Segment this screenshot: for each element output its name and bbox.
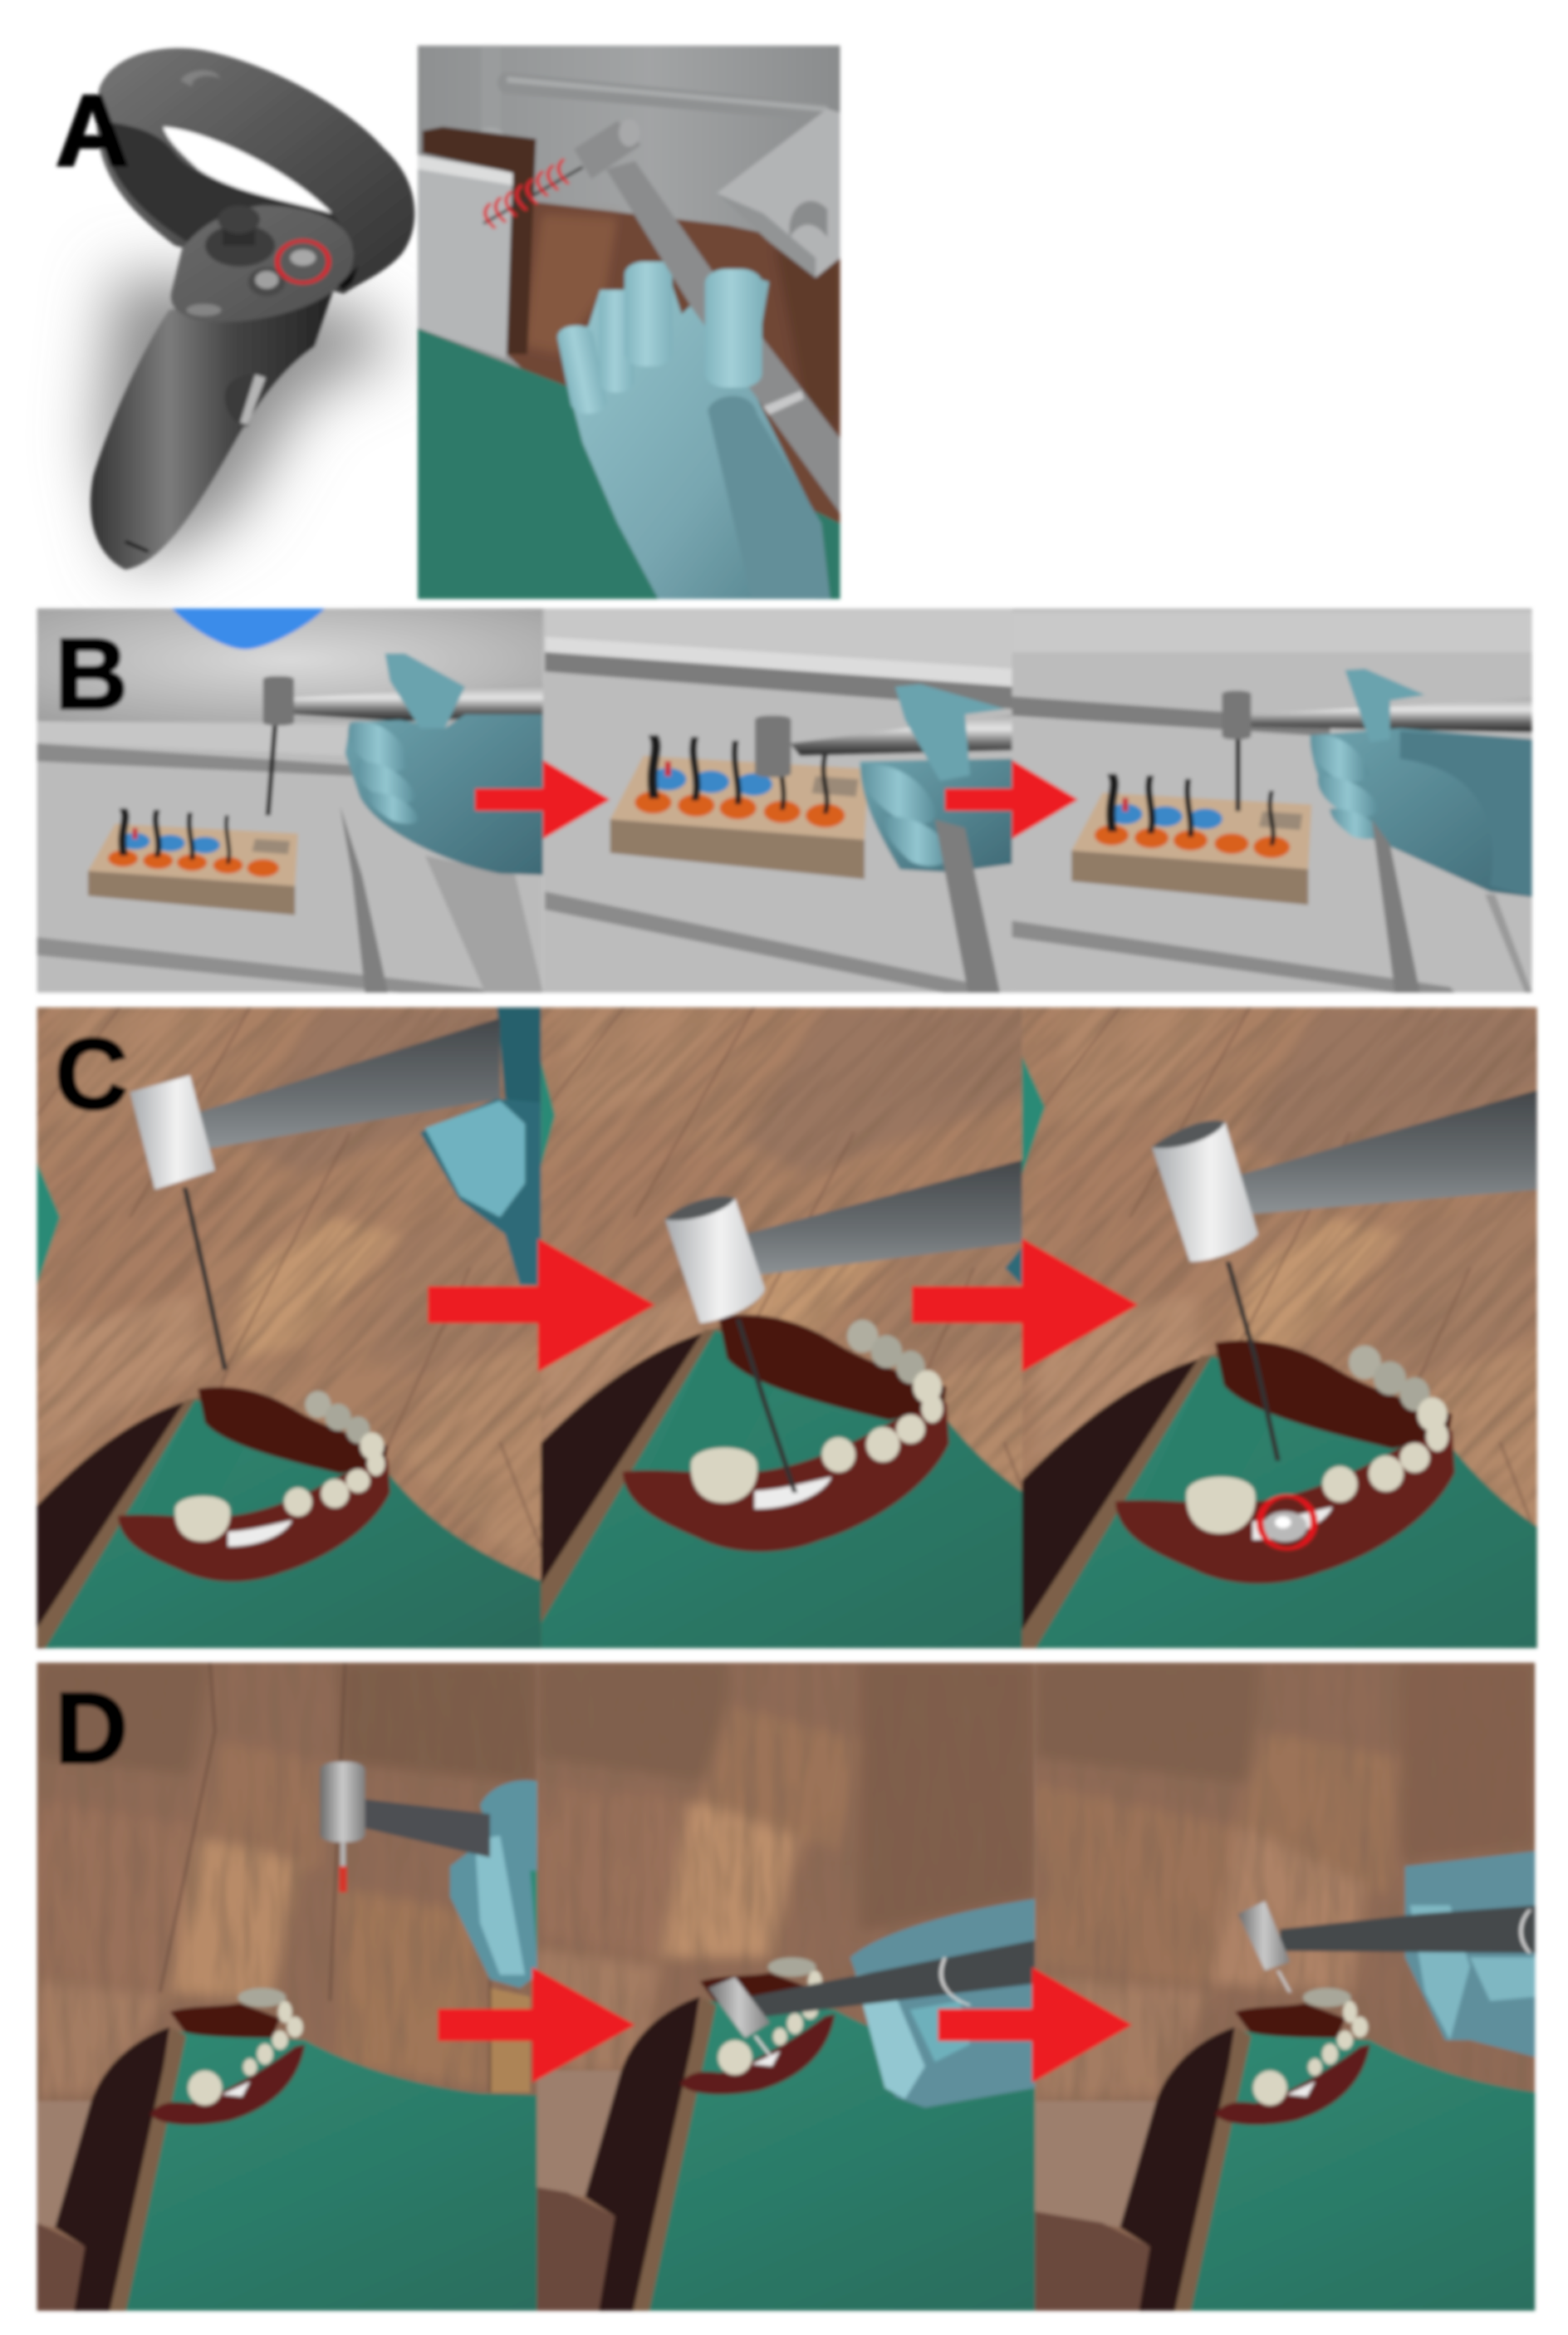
screenshot: hand holding handpiece in virtual scene <box>418 46 840 599</box>
label C: C <box>55 1018 128 1131</box>
arrow D2 to D3 <box>938 1967 1132 2082</box>
dental handpiece <box>574 119 840 513</box>
label A: A <box>56 74 129 187</box>
arrow B2 to B3 <box>945 760 1078 839</box>
highlight ring around implant site <box>1260 1496 1314 1548</box>
frame B1 <box>37 608 543 993</box>
frame B2 <box>543 608 1012 993</box>
arrow D1 to D2 <box>438 1967 635 2082</box>
arrow C2 to C3 <box>912 1239 1138 1372</box>
highlight ring <box>277 241 329 282</box>
handpiece with drill <box>130 1018 500 1370</box>
red drill spiral <box>483 159 583 228</box>
panel C: drilling into the virtual mandible <box>33 1004 1540 1651</box>
handpiece with red implant driver <box>320 1762 490 1892</box>
arrow B1 to B2 <box>475 760 610 839</box>
panel B: picking up a drill from the tool block <box>37 608 1532 993</box>
frame D1 <box>0 1663 900 2335</box>
photo: VR hand controller with highlighted button <box>91 48 414 571</box>
arrow C1 to C2 <box>428 1239 655 1372</box>
frame D2 <box>230 1663 1430 2335</box>
gloved hand <box>450 1780 537 1988</box>
frame C3 <box>1019 1004 1540 1651</box>
frame C1 <box>33 1004 544 1651</box>
frame C2 <box>538 1004 1025 1651</box>
label D: D <box>55 1671 128 1784</box>
frame D3 <box>765 1663 1568 2335</box>
frame B3 <box>1012 608 1532 993</box>
panel D: placing the implant <box>0 1663 1568 2335</box>
panel A: VR controller and virtual handpiece <box>56 46 840 599</box>
label B: B <box>55 617 128 730</box>
